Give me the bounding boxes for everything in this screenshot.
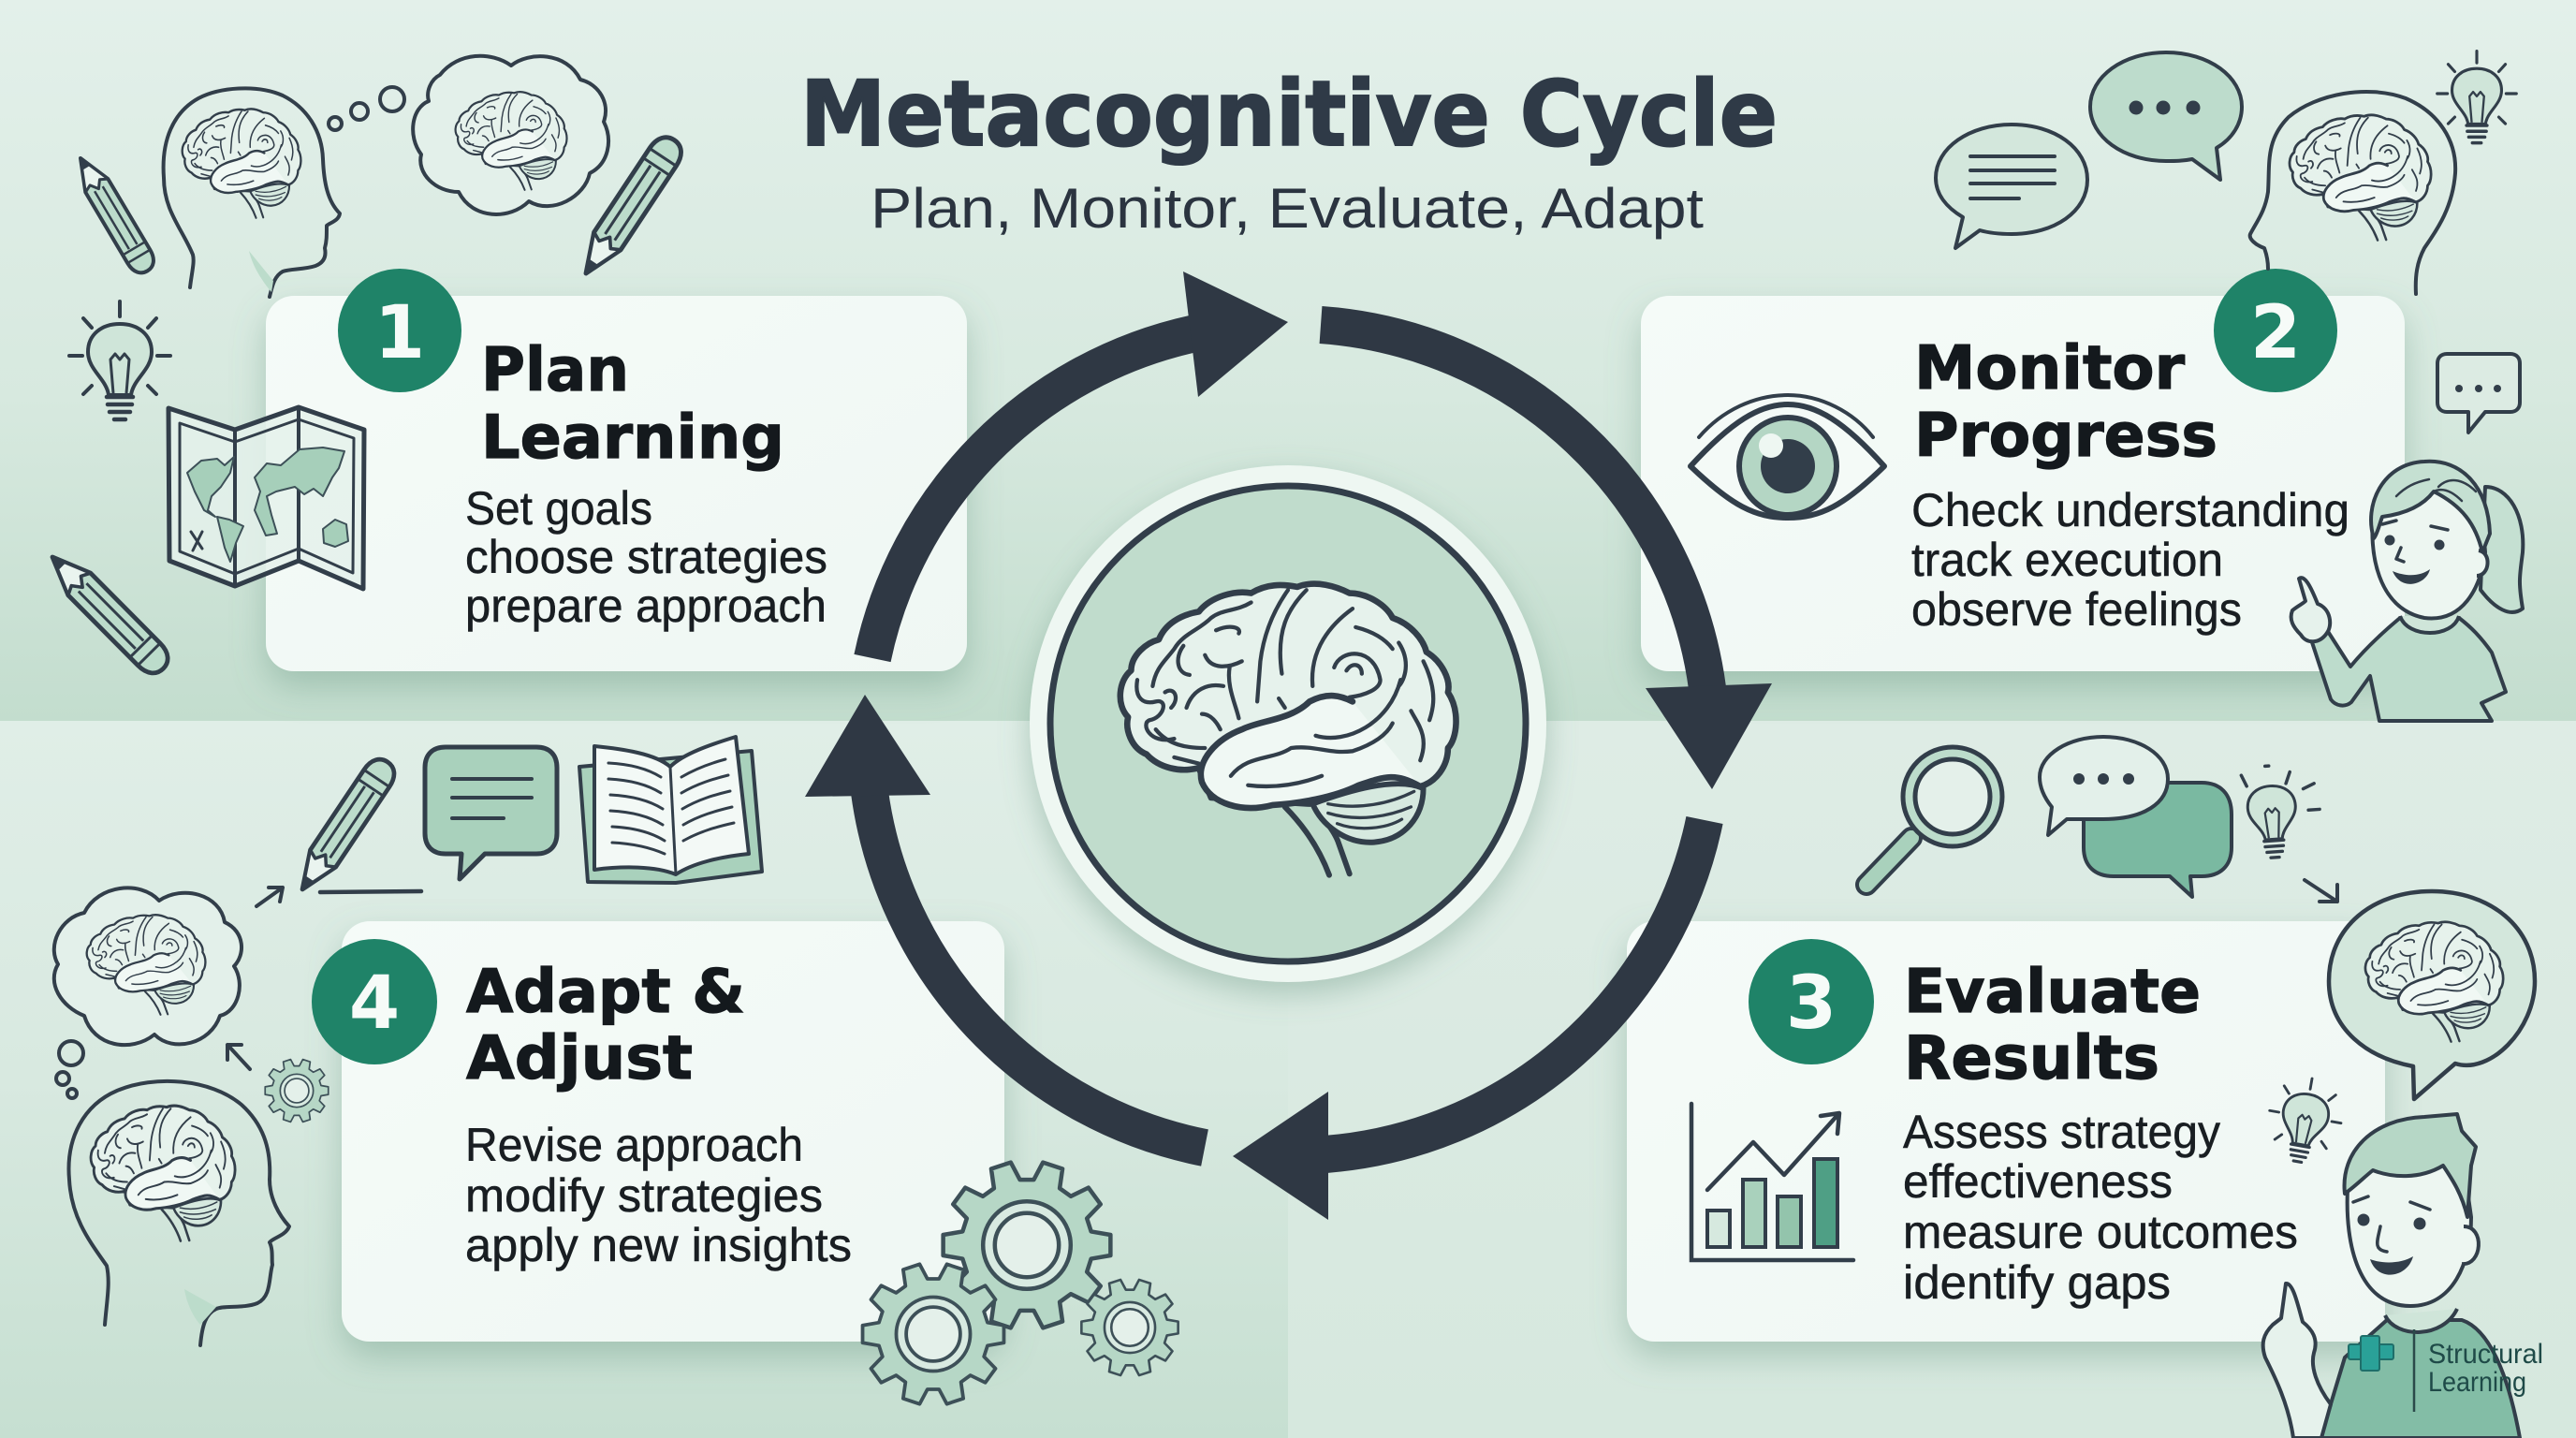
heading: Plan [481,336,629,405]
heading [481,336,784,473]
logo text: Learning [2428,1367,2526,1398]
logo text [2428,1339,2543,1398]
icon: light bulb top right [2437,51,2516,143]
bar chart icon [1691,1104,1853,1260]
body text: Check understanding [1911,484,2349,536]
heading: Evaluate [1904,958,2201,1027]
icon: pencil 3 [41,546,174,680]
number badge 4 [312,939,437,1064]
body text [465,1119,852,1271]
heading [1904,958,2201,1093]
icon: head with brain, top left [164,88,340,297]
body text: Assess strategy [1903,1106,2220,1158]
heading: Learning [481,404,784,473]
body text [465,482,827,632]
number badge 1: 1 [374,291,425,375]
body text: prepare approach [465,580,827,632]
icon: green chat bubble with lines [425,747,557,879]
title: Metacognitive Cycle [800,62,1778,167]
body text: apply new insights [465,1219,852,1271]
cycle arrow: plan to monitor [872,271,1288,658]
card background [266,296,967,671]
body text: modify strategies [465,1169,823,1222]
icon: light bulb bottom right [2241,763,2322,859]
logo: structural learning [2349,1329,2543,1412]
icon: eye [1690,395,1884,518]
icon: central brain [1120,584,1456,875]
heading: Adjust [466,1024,693,1093]
body text: choose strategies [465,531,827,583]
icon: light bulb left [69,301,170,419]
body text: effectiveness [1903,1155,2173,1208]
thought dots, top left [329,87,404,130]
card background [342,921,1004,1342]
number badge 4: 4 [349,961,400,1046]
heading [1914,334,2217,471]
number badge 2: 2 [2250,291,2301,375]
small arrow to cloud [227,1045,250,1069]
icon: head with brain, bottom left [68,1081,289,1345]
panel: evaluate results [1627,921,2385,1342]
thought dots, bottom left [56,1041,83,1098]
body text: identify gaps [1903,1256,2171,1309]
thought cloud, bottom left [54,888,242,1045]
brain speech bubble [2329,891,2535,1099]
icon: outline chat bubble with dots [2040,737,2168,835]
number badge 1 [338,269,461,392]
heading: Progress [1914,402,2217,471]
icon: large gear left [863,1264,1003,1404]
icon: large gear right [1081,1280,1178,1375]
body text [1911,484,2349,636]
body text [1903,1106,2298,1309]
heading [466,958,745,1093]
panel: adapt and adjust [312,921,1004,1342]
icon: small gear [265,1060,329,1122]
small arrow to brain bubble [2305,880,2337,902]
body text: observe feelings [1911,583,2242,636]
icon: pencil 2 [573,131,688,282]
central brain medallion [1030,465,1546,982]
body text: measure outcomes [1903,1206,2298,1258]
illustration: girl pointing [2291,462,2523,721]
heading: Results [1904,1024,2159,1093]
body text: Set goals [465,482,652,535]
card background [1641,296,2405,671]
body text: Revise approach [465,1119,803,1171]
heading: Monitor [1914,334,2185,404]
logo mark [2349,1336,2393,1371]
cycle arrow: monitor to evaluate [1321,325,1772,789]
cycle arrow: adapt to plan [805,695,1205,1148]
icon: world map [168,407,364,589]
small arrow to pencil [256,888,283,906]
panel: monitor progress [1641,269,2405,671]
number badge 3: 3 [1786,961,1837,1046]
number badge 2 [2214,269,2337,392]
icon: speech bubble with dots [2090,52,2242,180]
logo text: Structural [2428,1339,2543,1370]
icon: light bulb in card three [2261,1072,2348,1167]
thought cloud, top left [413,56,608,214]
icon: pencil with line, bottom left [289,754,421,898]
subtitle: Plan, Monitor, Evaluate, Adapt [871,177,1704,240]
icon: pencil 1 [69,152,159,278]
panel: plan learning [266,269,967,671]
icon: head with brain, top right [2250,92,2455,294]
cycle arrow: evaluate to adapt [1233,820,1705,1220]
icon: magnifying glass [1866,747,2002,885]
card background [1627,921,2385,1342]
icon: small chat bubble [2437,354,2520,433]
icon: solid teal chat bubble [2084,783,2232,897]
body text: track execution [1911,534,2223,586]
number badge 3 [1749,939,1874,1064]
icon: speech bubble with lines [1936,125,2087,248]
icon: open book [579,737,762,883]
heading: Adapt & [466,958,745,1027]
icon: large gear top [944,1163,1110,1328]
illustration: boy pointing [2263,1114,2520,1438]
